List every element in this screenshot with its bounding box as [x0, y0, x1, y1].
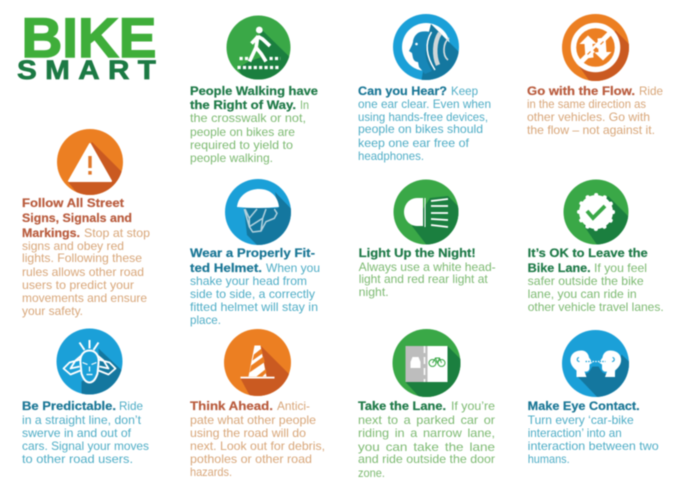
text: take the lane: and ride outside the door — [358, 452, 495, 466]
text: ok to leave the bike lane: If you feel — [594, 261, 647, 275]
text: wear a helmet: ted Helmet. — [190, 261, 262, 275]
text: make eye contact — [528, 399, 659, 466]
icon: headlight — [392, 178, 460, 246]
text: can you hear: keep one ear free of — [358, 136, 470, 150]
text: wear a helmet: shake your head from — [190, 274, 307, 288]
icon: helmet — [224, 178, 292, 246]
panel: ok to leave the bike lane — [528, 180, 664, 314]
text: follow all street signs: Follow All Street — [22, 196, 124, 210]
text: go with the flow: in the same direction as — [527, 97, 646, 111]
text: think ahead: next. Look out for debris, — [190, 439, 325, 453]
icon: two heads facing — [562, 330, 638, 400]
text: can you hear: Keep — [451, 84, 478, 98]
text: people walking: In — [300, 98, 309, 112]
text: go with the flow: Ride — [639, 84, 663, 98]
text: think ahead — [190, 399, 325, 479]
text: light up the night: Light Up the Night! — [359, 246, 476, 260]
text: be predictable — [22, 399, 149, 466]
text: wear a helmet: side to side, a correctly — [190, 287, 315, 301]
text: wear a helmet: When you — [266, 261, 320, 275]
text: people walking: people walking. — [190, 151, 273, 165]
text: can you hear: using hands-free devices, — [358, 110, 488, 124]
text: can you hear — [358, 84, 491, 163]
text: can you hear: people on bikes should — [358, 122, 483, 136]
text: ok to leave the bike lane: It’s OK to Leave the — [528, 246, 648, 260]
text: be predictable: swerve in and out of — [22, 426, 132, 440]
icon: heads and sound waves — [392, 13, 460, 81]
text: be predictable: cars. Signal your moves — [22, 439, 149, 453]
text: think ahead: using the road will do — [190, 426, 306, 440]
text: think ahead: Antici- — [277, 399, 310, 413]
panel: go with the flow — [527, 14, 663, 137]
text: think ahead: pate what other people — [190, 413, 316, 427]
text: follow all street signs: lights. Following these — [22, 251, 142, 265]
text: make eye contact: interaction’ into an — [528, 426, 622, 440]
icon: warning triangle — [56, 128, 124, 196]
text: take the lane: you can take the lane — [358, 440, 495, 454]
text: take the lane: zone. — [358, 466, 385, 480]
title: Bike Smart: SMART — [17, 55, 156, 85]
text: go with the flow: Go with the Flow. — [527, 84, 635, 98]
text: wear a helmet: place. — [190, 313, 221, 327]
panel: light up the night — [359, 180, 496, 299]
text: think ahead: Think Ahead. — [190, 399, 273, 413]
text: follow all street signs: Signs, Signals and — [22, 211, 132, 225]
text: ok to leave the bike lane: safer outside the bike — [528, 274, 644, 288]
panel: people walking — [190, 16, 318, 165]
text: take the lane: Take the Lane. — [358, 399, 446, 413]
panel: be predictable — [22, 328, 149, 466]
icon: check badge — [562, 178, 630, 246]
text: people walking: the crosswalk or not, — [190, 111, 306, 125]
panel: follow all street signs — [22, 129, 150, 318]
text: ok to leave the bike lane: Bike Lane. — [528, 261, 591, 275]
text: follow all street signs: users to predict your — [22, 278, 134, 292]
text: make eye contact: Make Eye Contact. — [528, 399, 640, 413]
icon: pedestrian on crosswalk — [226, 14, 292, 80]
text: wear a helmet: fitted helmet will stay in — [190, 300, 318, 314]
text: people walking: People Walking have — [190, 84, 318, 98]
text: light up the night: night. — [359, 285, 389, 299]
text: light up the night: light and red rear light at — [359, 272, 488, 286]
text: wear a helmet — [190, 246, 320, 327]
text: people walking: required to yield to — [190, 138, 293, 152]
text: take the lane: next to a parked car or — [358, 413, 495, 427]
text: go with the flow: other vehicles. Go with — [527, 110, 650, 124]
title: Bike Smart: BIKE — [22, 6, 156, 69]
text: follow all street signs: signs and obey red — [22, 239, 124, 253]
text: wear a helmet: Wear a Properly Fit- — [190, 246, 315, 260]
panel: make eye contact — [528, 330, 659, 466]
text: take the lane: If you’re — [451, 399, 495, 413]
text: light up the night: Always use a white head- — [359, 260, 496, 274]
text: ok to leave the bike lane: lane, you can ride in — [528, 287, 637, 301]
text: ok to leave the bike lane — [528, 246, 664, 314]
panel: think ahead — [190, 329, 325, 479]
text: go with the flow — [527, 84, 663, 137]
text: can you hear: headphones. — [358, 149, 424, 163]
icon: head looking around — [56, 328, 124, 396]
text: make eye contact: interaction between two — [528, 439, 659, 453]
text: be predictable: Ride — [119, 399, 143, 413]
text: can you hear: Can you Hear? — [358, 84, 447, 98]
text: follow all street signs: movements and ensure — [22, 291, 147, 305]
text: follow all street signs: Stop at stop — [84, 226, 150, 240]
text: make eye contact: humans. — [528, 452, 570, 466]
text: go with the flow: the flow – not against it. — [527, 123, 655, 137]
icon: no wrong-way arrows — [561, 13, 630, 82]
text: be predictable: in a straight line, don’t — [22, 413, 142, 427]
text: be predictable: to other road users. — [22, 452, 133, 466]
text: follow all street signs: rules allows other road — [22, 265, 144, 279]
text: think ahead: hazards. — [190, 465, 232, 479]
panel: take the lane — [358, 329, 495, 480]
text: think ahead: potholes or other road — [190, 452, 312, 466]
text: take the lane — [358, 399, 495, 480]
panel: can you hear — [358, 14, 491, 163]
text: follow all street signs: Markings. — [22, 226, 80, 240]
text: take the lane: riding in a narrow lane, — [358, 426, 495, 440]
text: people walking: people on bikes are — [190, 125, 295, 139]
text: make eye contact: Turn every ‘car-bike — [528, 413, 634, 427]
text: follow all street signs: your safety. — [22, 304, 83, 318]
text: people walking: the Right of Way. — [190, 98, 296, 112]
panel: wear a helmet — [190, 179, 320, 327]
text: people walking — [190, 84, 318, 165]
text: ok to leave the bike lane: other vehicle travel lanes. — [528, 300, 664, 314]
icon: car and bike lane — [392, 328, 462, 398]
text: follow all street signs — [22, 196, 150, 318]
text: be predictable: Be Predictable. — [22, 399, 116, 413]
text: can you hear: one ear clear. Even when — [358, 97, 491, 111]
text: light up the night — [359, 246, 496, 299]
icon: traffic cone — [223, 328, 292, 397]
